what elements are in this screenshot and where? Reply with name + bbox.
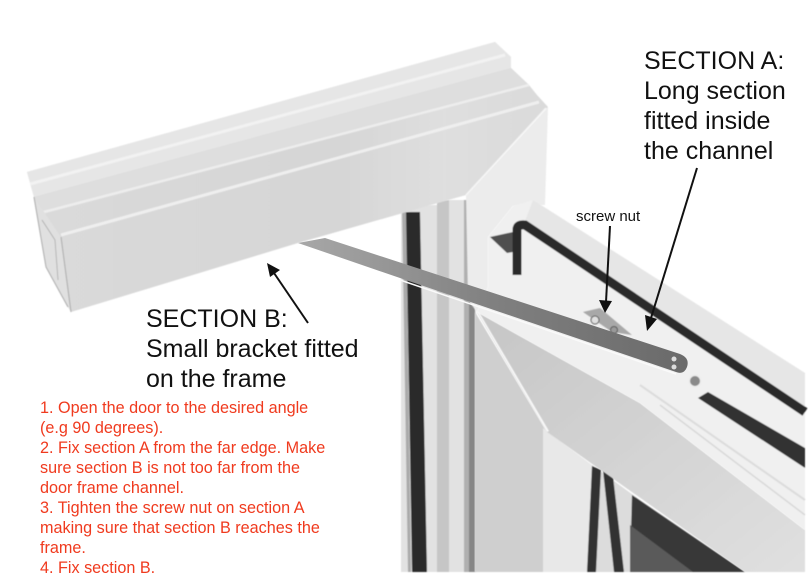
photo: vertical door frame jamb — [401, 200, 476, 572]
callout: section A: Long section — [644, 77, 786, 105]
arrow: section A — [645, 168, 697, 331]
photo: corner jamb below the miter — [466, 107, 548, 312]
photo: sash top surface and outer frame — [477, 200, 805, 530]
callout: section A: the channel — [644, 137, 773, 165]
instructions text: making sure that section B reaches the — [40, 519, 320, 537]
arrow: section B — [267, 263, 308, 323]
callout: section A: SECTION A: — [644, 47, 784, 75]
photo: long stay arm — [298, 238, 688, 374]
instructions text: 4. Fix section B. — [40, 559, 155, 577]
instructions text: frame. — [40, 539, 86, 557]
photo: top frame beam — [27, 42, 548, 312]
instructions text: sure section B is not too far from the — [40, 459, 300, 477]
photo: screw and bracket hardware — [583, 308, 701, 387]
callout: section B: on the frame — [146, 365, 286, 393]
photo: sash front face — [477, 312, 805, 572]
callout: section B: SECTION B: — [146, 305, 288, 333]
instructions text: (e.g 90 degrees). — [40, 419, 163, 437]
label: screw nut: screw nut — [576, 208, 641, 225]
photo: door pane below the sash — [475, 312, 745, 572]
instructions text: door frame channel. — [40, 479, 184, 497]
instructions text: 3. Tighten the screw nut on section A — [40, 499, 305, 517]
arrow: screw nut — [599, 226, 612, 313]
instructions text: 2. Fix section A from the far edge. Make — [40, 439, 325, 457]
callout: section B: Small bracket fitted — [146, 335, 359, 363]
callout: section A: fitted inside — [644, 107, 770, 135]
instructions text: 1. Open the door to the desired angle — [40, 399, 308, 417]
